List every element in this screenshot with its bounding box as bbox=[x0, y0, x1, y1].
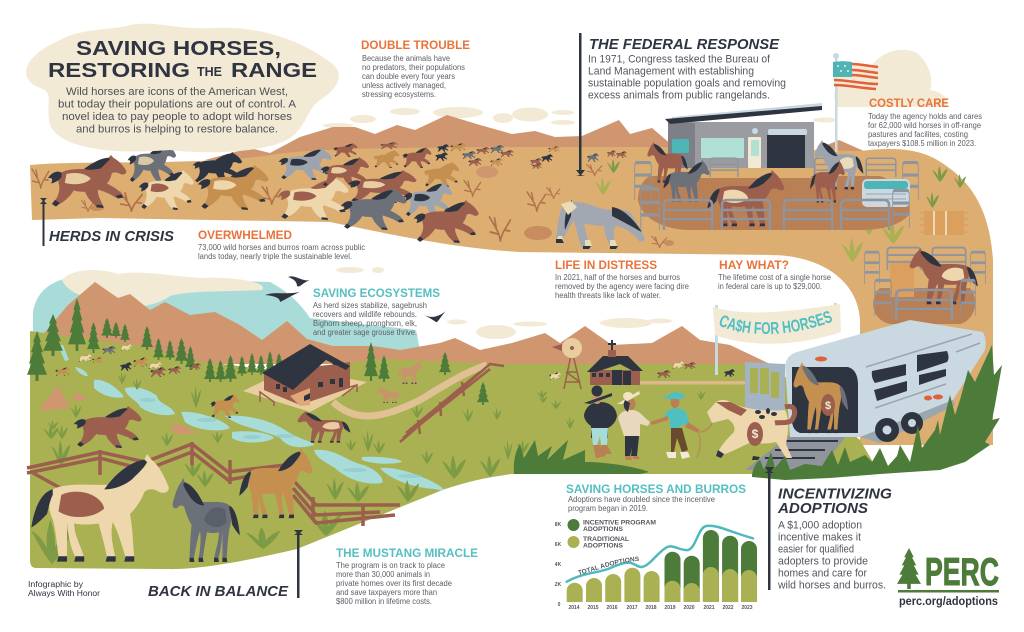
cash for horses banner bbox=[713, 303, 841, 375]
text: costly care: taxpayers $108.5 million in 2023. bbox=[868, 139, 976, 148]
river bbox=[58, 345, 443, 490]
intro paragraph: but today their populations are out of control. A bbox=[58, 99, 297, 111]
text: the mustang miracle: $800 million in lifetime costs. bbox=[336, 597, 432, 606]
year labels: 2020 bbox=[683, 605, 695, 611]
horse: tan bbox=[198, 165, 269, 210]
text: double trouble: Because the animals have bbox=[362, 54, 451, 63]
text: the federal response: Land Management with establishing bbox=[588, 66, 754, 78]
text: incentivizing adoptions: homes and care for bbox=[778, 567, 867, 579]
horse: brown spotted bbox=[348, 170, 417, 203]
horse: brown running in meadow bbox=[74, 406, 142, 448]
y axis labels: 2K bbox=[555, 582, 562, 588]
top scene: herds in crisis bbox=[30, 50, 993, 445]
text: overwhelmed bbox=[198, 228, 365, 261]
ramp bbox=[745, 431, 850, 470]
horse: brown bbox=[320, 157, 369, 187]
fence front bbox=[641, 189, 909, 230]
desert details bbox=[32, 164, 674, 248]
text: incentivizing adoptions: A $1,000 adoption bbox=[778, 519, 862, 531]
trailer opening bbox=[792, 367, 858, 433]
distant herd and wildlife bbox=[55, 344, 423, 403]
horse: gray in corral bbox=[663, 160, 710, 201]
text: costly care bbox=[868, 96, 982, 148]
horse: tan standing bbox=[239, 448, 312, 518]
sky bbox=[33, 276, 420, 350]
money bag: $ bbox=[752, 427, 759, 441]
intro paragraph: and burros is helping to restore balance. bbox=[76, 124, 278, 136]
clouds behind mountains bbox=[323, 50, 947, 128]
horse: brown patch in corral bbox=[707, 170, 784, 226]
title cloud bbox=[26, 24, 339, 152]
text: life in distress: health threats like lack of water. bbox=[555, 291, 661, 300]
horse: cream paint bbox=[31, 454, 169, 562]
horse trailer bbox=[745, 320, 986, 470]
total adoptions line bbox=[567, 526, 753, 582]
y axis labels: 0 bbox=[558, 602, 561, 608]
text: life in distress bbox=[555, 258, 690, 300]
sick horse grazing bbox=[556, 200, 645, 249]
text: saving ecosystems: As herd sizes stabilize, sagebrush bbox=[313, 301, 427, 310]
text: incentivizing adoptions bbox=[777, 486, 892, 591]
horse: gray front bbox=[341, 188, 407, 230]
text: double trouble: stressing ecosystems. bbox=[362, 90, 436, 99]
heading: back in balance: BACK IN BALANCE bbox=[148, 583, 289, 600]
incentive bars bbox=[664, 530, 757, 602]
farm road bbox=[590, 381, 785, 384]
horse: gray donkey bbox=[814, 140, 863, 189]
text: the federal response: THE FEDERAL RESPONSE bbox=[589, 36, 780, 53]
title block bbox=[26, 24, 339, 152]
marker: incentivizing adoptions bbox=[765, 467, 774, 590]
horse: tan back bbox=[423, 162, 459, 187]
text: overwhelmed: OVERWHELMED bbox=[198, 228, 292, 242]
far fence bbox=[400, 364, 504, 442]
marker: federal response bbox=[576, 33, 585, 176]
mountains, top band bbox=[205, 115, 700, 160]
text: the federal response: sustainable population goals and removing bbox=[588, 78, 786, 90]
adoptions chart block bbox=[554, 482, 757, 611]
text: the mustang miracle: THE MUSTANG MIRACLE bbox=[336, 546, 478, 560]
back fence bbox=[27, 442, 400, 526]
text: double trouble: can double every four years bbox=[362, 72, 455, 81]
line label bbox=[579, 561, 642, 575]
person with cream hat bbox=[617, 391, 650, 460]
text: overwhelmed: 73,000 wild horses and burros roam across public bbox=[198, 243, 365, 252]
chart legend: INCENTIVE PROGRAM bbox=[583, 520, 656, 526]
distant field horses bbox=[549, 361, 735, 380]
year labels bbox=[568, 605, 753, 611]
text: life in distress: LIFE IN DISTRESS bbox=[555, 258, 657, 272]
logo url: perc.org/adoptions bbox=[899, 596, 998, 608]
large barn bbox=[260, 344, 357, 406]
title text: RESTORING bbox=[48, 60, 190, 82]
year labels: 2021 bbox=[703, 605, 715, 611]
title text: SAVING HORSES, bbox=[76, 38, 281, 60]
horse: brown back bbox=[647, 142, 688, 182]
text: incentivizing adoptions: ADOPTIONS bbox=[777, 500, 868, 517]
adoptions chart block: TOTAL ADOPTIONS bbox=[578, 556, 639, 575]
text: life in distress: In 2021, half of the horses and burros bbox=[555, 273, 680, 282]
marker: back in balance bbox=[294, 530, 303, 598]
meadow bbox=[30, 331, 880, 569]
horse: gray foal bbox=[173, 478, 240, 562]
text: the federal response bbox=[588, 36, 786, 102]
text: hay what: HAY WHAT? bbox=[719, 258, 789, 272]
trailer body bbox=[785, 320, 986, 437]
year labels: 2016 bbox=[606, 605, 618, 611]
birds bbox=[265, 276, 446, 322]
text: the mustang miracle: private homes over its first decade bbox=[336, 579, 453, 588]
credit text bbox=[28, 580, 100, 598]
y axis labels: 4K bbox=[555, 562, 562, 568]
meadow tufts bbox=[31, 372, 705, 564]
text: double trouble: DOUBLE TROUBLE bbox=[361, 38, 470, 52]
corral bbox=[635, 140, 918, 230]
heading: herds in crisis: HERDS IN CRISIS bbox=[49, 228, 174, 245]
text: saving ecosystems: recovers and wildlife rebounds. bbox=[313, 310, 417, 319]
fence back bbox=[635, 158, 918, 200]
credit text: Always With Honor bbox=[28, 589, 100, 598]
lead rope bbox=[697, 418, 715, 458]
y axis labels: 6K bbox=[555, 542, 562, 548]
rocks bbox=[38, 385, 197, 434]
barn pad and road bbox=[243, 365, 487, 416]
windmill bbox=[552, 338, 582, 389]
horse: gray bbox=[128, 143, 176, 183]
chart description bbox=[568, 495, 716, 513]
intro paragraph: Wild horses are icons of the American West, bbox=[66, 86, 288, 98]
text: the mustang miracle: The program is on track to place bbox=[336, 561, 446, 570]
text: hay what: in federal care is up to $29,000. bbox=[718, 282, 822, 291]
year labels: 2019 bbox=[664, 605, 676, 611]
year labels: 2017 bbox=[626, 605, 638, 611]
text: double trouble bbox=[361, 38, 470, 99]
marker: herds in crisis bbox=[40, 198, 47, 246]
title text bbox=[48, 38, 317, 82]
trailer windows bbox=[872, 351, 948, 401]
text: incentivizing adoptions: incentive makes it bbox=[778, 532, 861, 544]
text: incentivizing adoptions: INCENTIVIZING bbox=[778, 486, 892, 503]
cash for horses banner: CA$H FOR HORSES bbox=[720, 311, 832, 334]
text: hay what bbox=[718, 258, 832, 291]
person with black hat bbox=[584, 386, 617, 458]
bottom scene: back in balance bbox=[27, 267, 880, 569]
text: saving ecosystems: and greater sage grouse thrive. bbox=[313, 328, 417, 337]
second corral bbox=[865, 248, 985, 324]
federal facility: building bbox=[665, 103, 822, 168]
year labels: 2023 bbox=[741, 605, 753, 611]
chart description: program began in 2019. bbox=[568, 504, 648, 513]
text: saving ecosystems: Bighorn sheep, pronghorn, elk, bbox=[313, 319, 417, 328]
year labels: 2022 bbox=[722, 605, 734, 611]
money bag on trailer horse bbox=[821, 394, 835, 416]
horses running bbox=[48, 142, 627, 243]
title text: THE bbox=[197, 64, 222, 79]
wheels bbox=[875, 412, 923, 442]
text: the mustang miracle: and save taxpayers more than bbox=[336, 588, 437, 597]
horse: small tan running bbox=[210, 394, 239, 418]
horse: brown by stream bbox=[297, 411, 350, 443]
text: costly care: pastures and facilites, costing bbox=[868, 130, 968, 139]
person with teal cap bbox=[650, 392, 700, 459]
water tank bbox=[862, 179, 910, 207]
traditional bars bbox=[567, 567, 757, 602]
cream horse with money bag bbox=[707, 400, 795, 460]
chart legend bbox=[568, 519, 656, 550]
desert tufts bbox=[595, 159, 966, 262]
PERC logo bbox=[897, 548, 999, 608]
horse in trailer bbox=[793, 362, 848, 433]
text: the mustang miracle: more than 30,000 animals in bbox=[336, 570, 430, 579]
trailer lights bbox=[815, 356, 943, 400]
trailer door bbox=[745, 362, 785, 430]
text: saving ecosystems bbox=[313, 286, 440, 337]
y axis labels: 8K bbox=[555, 522, 562, 528]
y axis labels bbox=[555, 522, 562, 608]
chart legend: ADOPTIONS bbox=[583, 542, 624, 550]
text: double trouble: unless actively managed, bbox=[362, 81, 446, 90]
horse: brown front bbox=[414, 200, 479, 243]
horse: brown foal bbox=[810, 160, 845, 202]
text: costly care: COSTLY CARE bbox=[869, 96, 949, 110]
band ground bbox=[30, 147, 993, 445]
text: the federal response: In 1971, Congress tasked the Bureau of bbox=[588, 54, 771, 66]
title text: RANGE bbox=[231, 60, 317, 82]
year labels: 2018 bbox=[645, 605, 657, 611]
clouds bbox=[62, 267, 672, 339]
text: double trouble: no predators, their populations bbox=[362, 63, 465, 72]
horse: blue gray front bbox=[404, 182, 452, 217]
credit text: Infographic by bbox=[28, 580, 83, 589]
year labels: 2015 bbox=[587, 605, 599, 611]
hay bale bbox=[920, 211, 968, 235]
text: costly care: for 62,000 wild horses in off-range bbox=[868, 121, 982, 130]
horse: cream large bbox=[278, 177, 349, 220]
mountains, bottom band bbox=[40, 282, 770, 364]
intro paragraph: novel idea to pay people to adopt wild horses bbox=[62, 111, 293, 123]
trees bbox=[27, 298, 489, 405]
horse: brown appaloosa bbox=[48, 155, 126, 208]
foreground grass bbox=[514, 345, 1002, 480]
wildlife elk bbox=[398, 361, 423, 384]
chart legend: TRADITIONAL bbox=[583, 536, 629, 543]
farmhouse barn bbox=[587, 340, 643, 385]
chart description: Adoptions have doubled since the incentive bbox=[568, 495, 716, 504]
text: incentivizing adoptions: wild horses and burros. bbox=[777, 579, 886, 591]
horse: blue gray bbox=[279, 148, 332, 180]
text: life in distress: removed by the agency were facing dire bbox=[555, 282, 690, 291]
text: the federal response: excess animals from public rangelands. bbox=[588, 90, 770, 102]
horse: black bbox=[193, 152, 242, 183]
text: incentivizing adoptions: adopters to provide bbox=[778, 555, 868, 567]
people shaking hands bbox=[584, 386, 715, 460]
text: the mustang miracle bbox=[336, 546, 478, 606]
year labels: 2014 bbox=[568, 605, 580, 611]
text: overwhelmed: lands today, nearly triple the sustainable level. bbox=[198, 252, 352, 261]
chart legend: ADOPTIONS bbox=[583, 526, 624, 533]
flag and pole bbox=[833, 53, 878, 152]
text: incentivizing adoptions: easier for qualified bbox=[778, 543, 854, 555]
logo tree bbox=[897, 548, 921, 589]
horse: paddock horse bbox=[910, 248, 978, 304]
text: hay what: The lifetime cost of a single horse bbox=[718, 273, 832, 282]
text: saving ecosystems: SAVING ECOSYSTEMS bbox=[313, 286, 440, 300]
chart heading: SAVING HORSES AND BURROS bbox=[566, 482, 746, 496]
money bag on trailer horse: $ bbox=[825, 400, 831, 412]
horse: cream bbox=[139, 170, 194, 210]
text: costly care: Today the agency holds and cares bbox=[868, 112, 982, 121]
distant horses bbox=[333, 142, 627, 169]
intro paragraph bbox=[58, 86, 297, 136]
